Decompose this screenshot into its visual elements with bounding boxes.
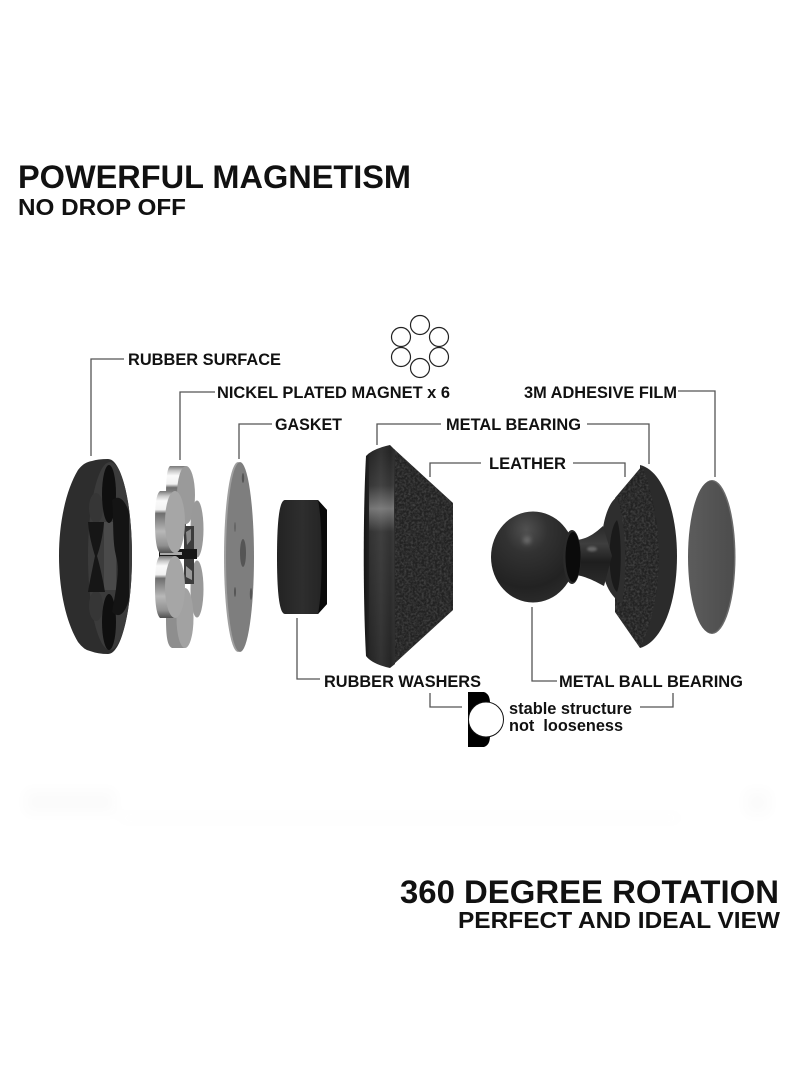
ball <box>491 512 575 602</box>
magnet: bottom <box>166 588 194 648</box>
label: leather: LEATHER <box>489 455 566 473</box>
central chrome gap <box>159 526 197 584</box>
part: large cup with leather <box>364 445 453 668</box>
labels <box>128 351 743 735</box>
label: rubber surface: RUBBER SURFACE <box>128 351 281 369</box>
icon: ball in socket cross-section <box>468 692 504 747</box>
part: rubber washer <box>277 500 327 614</box>
part: 3M adhesive film <box>688 480 736 634</box>
neck <box>577 526 612 586</box>
label: gasket: GASKET <box>275 416 342 434</box>
leather <box>615 466 659 648</box>
label: rubber washers: RUBBER WASHERS <box>324 673 481 691</box>
label: stable structure: stable structure <box>509 700 632 718</box>
label: 3M adhesive film: 3M ADHESIVE FILM <box>524 384 677 402</box>
part: gasket <box>224 462 254 652</box>
leather cone <box>394 449 453 664</box>
icon: six magnet ring <box>392 316 448 378</box>
heading: 360 degree rotation <box>400 874 780 933</box>
title: powerful magnetism: NO DROP OFF <box>18 194 186 220</box>
metal rim <box>364 445 395 668</box>
magnet: right lower <box>190 560 204 618</box>
label: not looseness: not looseness <box>509 717 623 735</box>
heading: 360 degree rotation: PERFECT AND IDEAL VIEW <box>458 907 780 933</box>
label: metal bearing: METAL BEARING <box>446 416 581 434</box>
magnet: right upper <box>190 500 204 558</box>
heading: 360 degree rotation: 360 DEGREE ROTATION <box>400 874 779 910</box>
magnet recesses <box>88 465 129 650</box>
magnet: lower left <box>155 556 185 618</box>
magnet: upper left <box>155 491 185 553</box>
part: rubber surface disc <box>59 459 132 654</box>
magnet: top <box>166 466 195 526</box>
part: nickel plated magnets <box>155 466 204 648</box>
rim <box>640 465 677 648</box>
leader lines <box>91 359 715 707</box>
label: nickel plated magnet: NICKEL PLATED MAGNET x 6 <box>217 384 450 402</box>
title: powerful magnetism: POWERFUL MAGNETISM <box>18 159 411 195</box>
part: ball mount with leather base <box>491 465 677 648</box>
faint shadow smudge <box>25 790 770 821</box>
inner collar <box>601 497 625 604</box>
title: powerful magnetism <box>18 159 411 220</box>
label: metal ball bearing: METAL BALL BEARING <box>559 673 743 691</box>
